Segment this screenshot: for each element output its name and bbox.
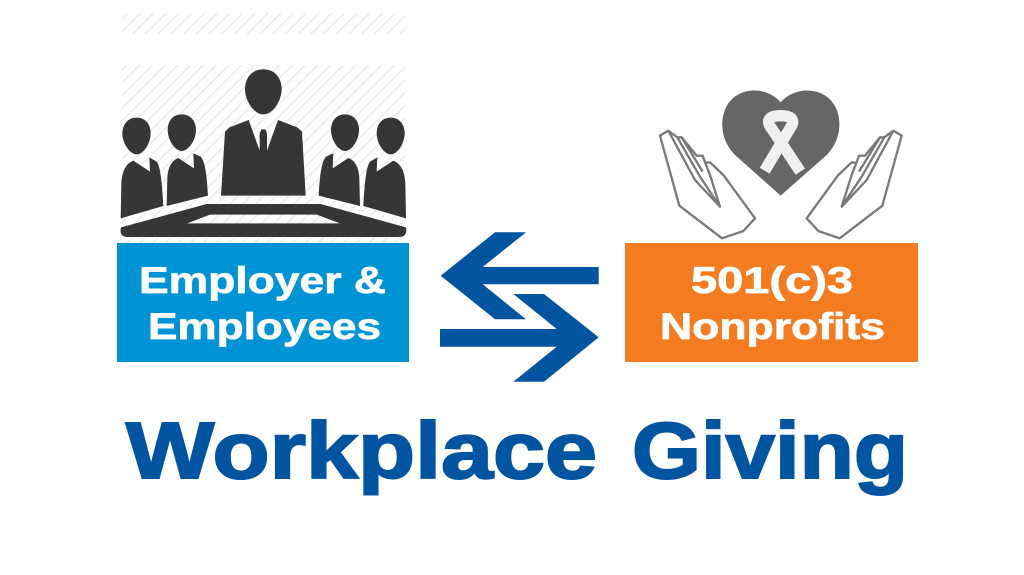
title: Workplace [126,406,597,495]
hatched icon background [122,65,405,243]
group of people [121,69,406,237]
panel: employer and employees [117,243,409,362]
left hand [660,131,755,238]
label: employer and employees: Employer & [139,260,386,301]
icon: employer and employees at a table [121,65,406,243]
left people [122,118,151,154]
title: Giving [632,406,908,495]
arrow: left [441,232,599,319]
label: 501(c)3 nonprofits [660,260,885,347]
heart [722,91,839,196]
ribbon [765,116,800,172]
label: employer and employees [139,260,386,347]
label: employer and employees: Employees [148,306,381,347]
right hand [807,131,902,238]
center head [245,69,282,114]
title [126,406,908,495]
arrow: right [440,294,599,382]
hatched strip [122,13,405,34]
icon: hands holding heart with ribbon [660,91,902,238]
arrows: exchange [440,232,599,382]
label: 501(c)3 nonprofits: 501(c)3 [691,260,853,301]
center body [221,120,306,196]
label: 501(c)3 nonprofits: Nonprofits [660,306,885,347]
panel: 501(c)3 nonprofits [625,243,918,362]
table [121,204,406,237]
right people [331,114,359,151]
